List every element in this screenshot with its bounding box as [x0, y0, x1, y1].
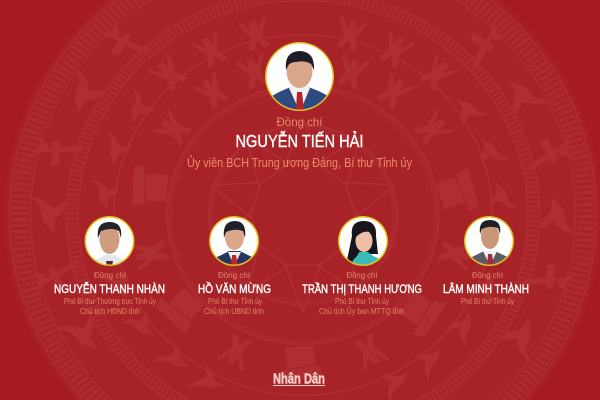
- role lines: Chủ tịch HĐND tỉnh: [80, 307, 140, 316]
- name: Nguyễn Thanh Nhàn: NGUYỄN THANH NHÀN: [54, 281, 165, 296]
- drum star: [205, 118, 401, 312]
- label: Đồng chí: Đồng chí: [218, 270, 251, 280]
- role lines: [319, 297, 404, 316]
- portrait: Trần Thị Thanh Hương: [338, 216, 388, 266]
- leader 4: [443, 216, 529, 306]
- name: Trần Thị Thanh Hương: TRẦN THỊ THANH HƯƠNG: [302, 281, 422, 296]
- label: Đồng chí: Đồng chí: [472, 270, 504, 280]
- label: Đồng chí: Đồng chí: [346, 270, 378, 280]
- name: Hồ Văn Mừng: HỒ VĂN MỪNG: [198, 281, 271, 296]
- leader 1: [54, 216, 165, 316]
- portrait: Lâm Minh Thành: [464, 216, 514, 266]
- portrait: Hồ Văn Mừng: [209, 216, 259, 266]
- role lines: Phó Bí thư Thường trực Tỉnh ủy: [64, 297, 156, 306]
- label: Đồng chí: Đồng chí: [94, 270, 127, 280]
- label: Đồng chí: Đồng chí: [276, 115, 323, 129]
- main leader: [187, 42, 412, 170]
- name: Nguyễn Tiến Hải: NGUYỄN TIẾN HẢI: [236, 130, 364, 151]
- role lines: [204, 297, 264, 316]
- name: Lâm Minh Thành: LÂM MINH THÀNH: [443, 281, 529, 296]
- logo: Nhân Dân: Nhân Dân: [273, 370, 325, 388]
- leader 2: [198, 216, 271, 316]
- leader 3: [302, 216, 422, 316]
- role lines: Phó Bí thư Tỉnh ủy: [208, 297, 262, 306]
- role lines: Chủ tịch UBND tỉnh: [204, 307, 264, 316]
- portrait: Nguyễn Thanh Nhàn: [84, 216, 134, 266]
- role lines: Chủ tịch Ủy ban MTTQ tỉnh: [319, 307, 404, 316]
- portrait: Nguyễn Tiến Hải: [265, 42, 334, 112]
- role line: Phó Bí thư Tỉnh ủy: [461, 297, 514, 306]
- role: Ủy viên BCH Trung ương Đảng, Bí thư Tỉnh ủy: [187, 155, 412, 170]
- role lines: [64, 297, 156, 316]
- role lines: Phó Bí thư Tỉnh ủy: [335, 297, 389, 306]
